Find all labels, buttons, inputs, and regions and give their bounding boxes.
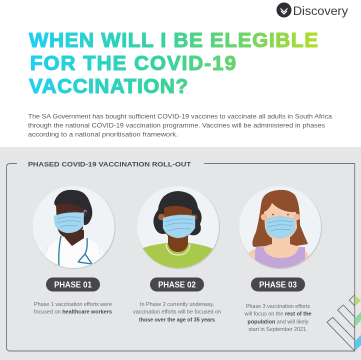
logo: Discovery: Discovery <box>293 4 349 18</box>
avatar: phase 2 person over 35 <box>137 186 220 270</box>
text: phase 01 description <box>34 302 112 316</box>
badge: phase 03 <box>251 278 305 292</box>
avatar: phase 1 healthcare worker <box>32 186 116 270</box>
badge: phase 03: PHASE 03 <box>259 280 298 290</box>
text: phase 03 description: Phase 3 vaccination efforts <box>246 304 310 310</box>
text: phase 03 description: start in September 2021. <box>248 327 308 333</box>
panel heading: PHASED COVID-19 VACCINATION ROLL-OUT <box>28 162 191 168</box>
title: FOR THE COVID-19 <box>30 52 236 75</box>
intro text: The SA Government has bought sufficient COVID-19 vaccines to vaccinate all adults in South Africa <box>28 114 332 120</box>
text: phase 02 description: vaccination efforts will be focused on <box>133 310 221 316</box>
text: phase 01 description: focused on healthcare workers <box>34 310 112 316</box>
badge: phase 02 <box>150 278 204 292</box>
intro text: through the national COVID-19 vaccination programme. Vaccines will be administered in phases <box>28 122 325 130</box>
text: phase 02 description: those over the age of 35 years <box>139 318 215 324</box>
title: VACCINATION? <box>29 75 188 98</box>
title: WHEN WILL I BE ELEGIBLE <box>29 29 318 52</box>
logo: Discovery <box>276 2 349 18</box>
text: phase 01 description: Phase 1 vaccination efforts were <box>34 302 112 308</box>
text: phase 03 description: will focus on the rest of the <box>244 312 312 318</box>
intro text: according to a national prioritisation framework. <box>28 132 178 138</box>
text: phase 03 description: population and will likely <box>248 320 309 326</box>
badge: phase 02: PHASE 02 <box>158 280 197 290</box>
avatar: phase 3 rest of population <box>239 186 322 270</box>
badge: phase 01: PHASE 01 <box>54 280 93 290</box>
title <box>29 29 318 98</box>
text: phase 03 description <box>244 304 312 333</box>
text: phase 02 description <box>133 302 221 324</box>
badge: phase 01 <box>46 278 100 292</box>
intro text <box>28 114 332 138</box>
panel: phased roll-out <box>0 147 361 360</box>
decoration: chevrons <box>327 295 361 351</box>
text: phase 02 description: In Phase 2 currently underway, <box>140 302 214 308</box>
